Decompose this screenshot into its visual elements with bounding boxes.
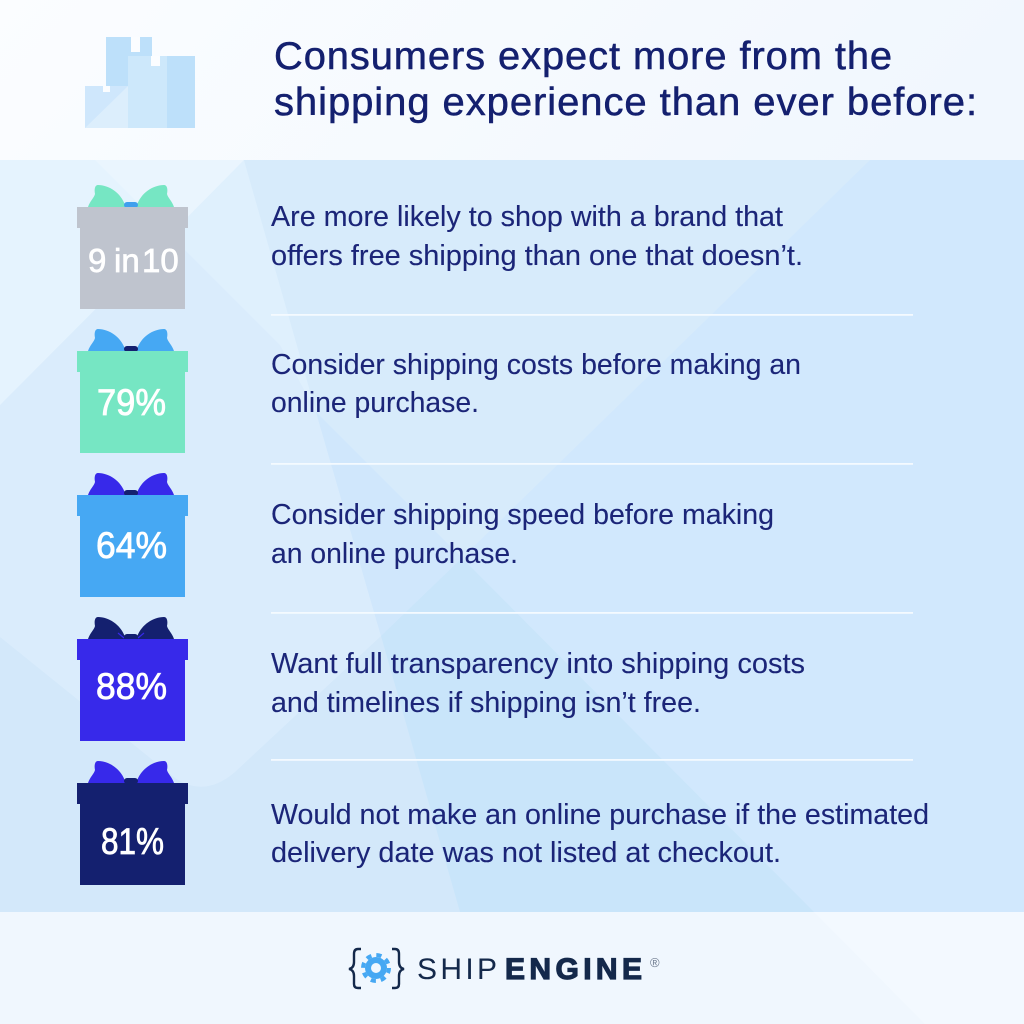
text: delivery date: delivery date was not listed at checkout. [271, 837, 781, 869]
gift: 9 in 10 [77, 185, 188, 309]
logo: ShipEngine [349, 949, 660, 988]
title: Consumers expect more from the [274, 35, 893, 78]
text: delivery date [271, 799, 929, 869]
gift: 9 in 10: 9 [88, 242, 106, 279]
text: shipping speed: Consider shipping speed before making [271, 499, 774, 531]
gift: 88%: 88% [96, 666, 167, 707]
text: delivery date: Would not make an online purchase if the estimated [271, 799, 929, 831]
text: shipping costs: online purchase. [271, 387, 479, 419]
gift: 64% [77, 473, 188, 597]
text: shipping speed [271, 499, 774, 570]
text: transparency: and timelines if shipping isn’t free. [271, 687, 701, 719]
logo: ShipEngine: ® [650, 955, 660, 970]
gift: 9 in 10: in [114, 242, 140, 279]
title: shipping experience than ever before: [274, 81, 978, 124]
text: free shipping: offers free shipping than one that doesn’t. [271, 240, 803, 272]
text: shipping costs: Consider shipping costs before making an [271, 349, 801, 381]
gift: 81% [77, 761, 188, 885]
gift: 88% [77, 617, 188, 741]
text: transparency: Want full transparency into shipping costs [271, 648, 805, 680]
logo: ShipEngine: SHIP [417, 953, 497, 986]
gift: 79% [77, 329, 188, 453]
text: free shipping: Are more likely to shop with a brand that [271, 201, 783, 233]
gift: 9 in 10: 10 [142, 242, 179, 279]
text: shipping speed: an online purchase. [271, 538, 518, 570]
gift: 64%: 64% [96, 525, 167, 566]
icon: stacked boxes [85, 37, 195, 128]
gift: 79%: 79% [97, 382, 166, 423]
text: shipping costs [271, 349, 801, 419]
title [274, 35, 978, 124]
text: transparency [271, 648, 805, 719]
text: free shipping [271, 201, 803, 272]
gift: 81%: 81% [101, 821, 164, 862]
logo: ShipEngine: ENGINE [505, 953, 642, 986]
